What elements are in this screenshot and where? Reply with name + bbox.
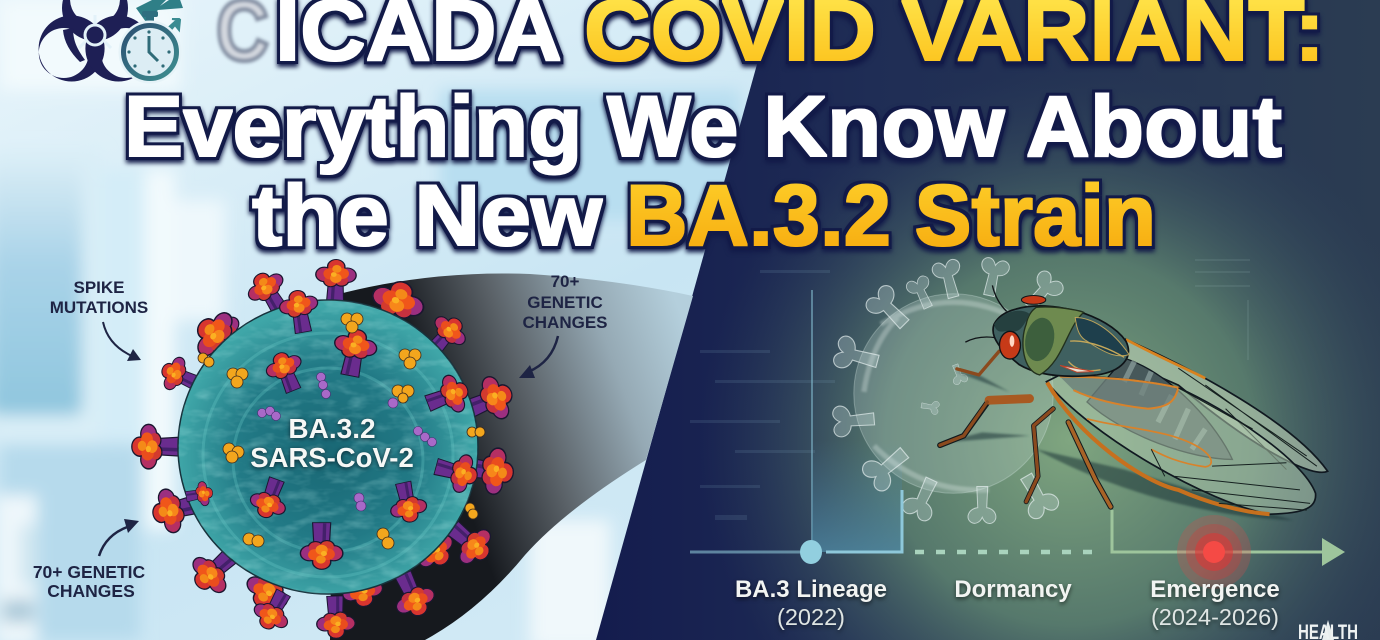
small purple proteins: [258, 372, 436, 511]
title line 3: [252, 168, 1156, 264]
title: [124, 0, 1325, 264]
label: emergence: Emergence: [1150, 576, 1280, 603]
timeline: [690, 490, 1345, 630]
small yellow proteins: [198, 313, 485, 549]
callout: 70+ genetic changes, right: GENETIC: [527, 293, 603, 312]
marker: BA.3 lineage: [800, 540, 822, 564]
virus sphere: [178, 300, 478, 594]
background: dark diagonal panel: [596, 0, 1380, 640]
virus illustration: [132, 259, 520, 639]
title line 3: the New: [252, 168, 603, 264]
icon: biohazard: [39, 0, 151, 82]
callout: 70+ genetic changes, left: [33, 519, 146, 601]
cicada illustration: [940, 285, 1328, 520]
callout: spike mutations: [50, 278, 148, 361]
callout: 70+ genetic changes, right: 70+: [551, 272, 579, 291]
icon: stopwatch: [120, 0, 183, 82]
callout: 70+ genetic changes, left: 70+ GENETIC: [33, 562, 146, 582]
virus label: SARS-CoV-2: [250, 442, 414, 473]
cicada eyes: [999, 331, 1020, 359]
outer spikes: [132, 259, 520, 639]
callout: 70+ genetic changes, left: CHANGES: [47, 581, 135, 601]
hind wing: [1124, 339, 1328, 472]
callout: 70+ genetic changes, right: CHANGES: [522, 313, 608, 332]
ghost virus behind cicada: [832, 256, 1066, 524]
marker: emergence pulse: [1177, 515, 1251, 589]
callout: 70+ genetic changes, right: [519, 272, 608, 378]
title line 3: BA.3.2 Strain: [626, 168, 1156, 264]
cicada shadow: [942, 372, 1293, 520]
label: BA.3 lineage: (2022): [777, 604, 845, 630]
label: emergence: [1150, 576, 1280, 630]
virus label: [250, 413, 414, 473]
front spikes: [184, 287, 482, 569]
timeline line: [690, 490, 1345, 566]
callout: spike mutations: SPIKE: [73, 278, 125, 297]
icon: biohazard and stopwatch logo: [39, 0, 183, 82]
forewing: [1046, 375, 1316, 514]
legs: [940, 351, 1111, 507]
label: emergence: (2024-2026): [1151, 604, 1279, 630]
virus label: BA.3.2: [288, 413, 376, 444]
antennae: [965, 285, 1007, 342]
label: dormancy: Dormancy: [954, 576, 1072, 603]
dark swoosh behind the virus: [330, 273, 693, 640]
label: BA.3 lineage: [735, 576, 887, 630]
abdomen: [1087, 358, 1232, 459]
title line 2: Everything We Know About: [124, 79, 1282, 175]
title line 1: [216, 0, 1325, 79]
label: BA.3 lineage: BA.3 Lineage: [735, 576, 887, 603]
callout: spike mutations: MUTATIONS: [50, 298, 148, 317]
thorax and head: [993, 306, 1128, 376]
